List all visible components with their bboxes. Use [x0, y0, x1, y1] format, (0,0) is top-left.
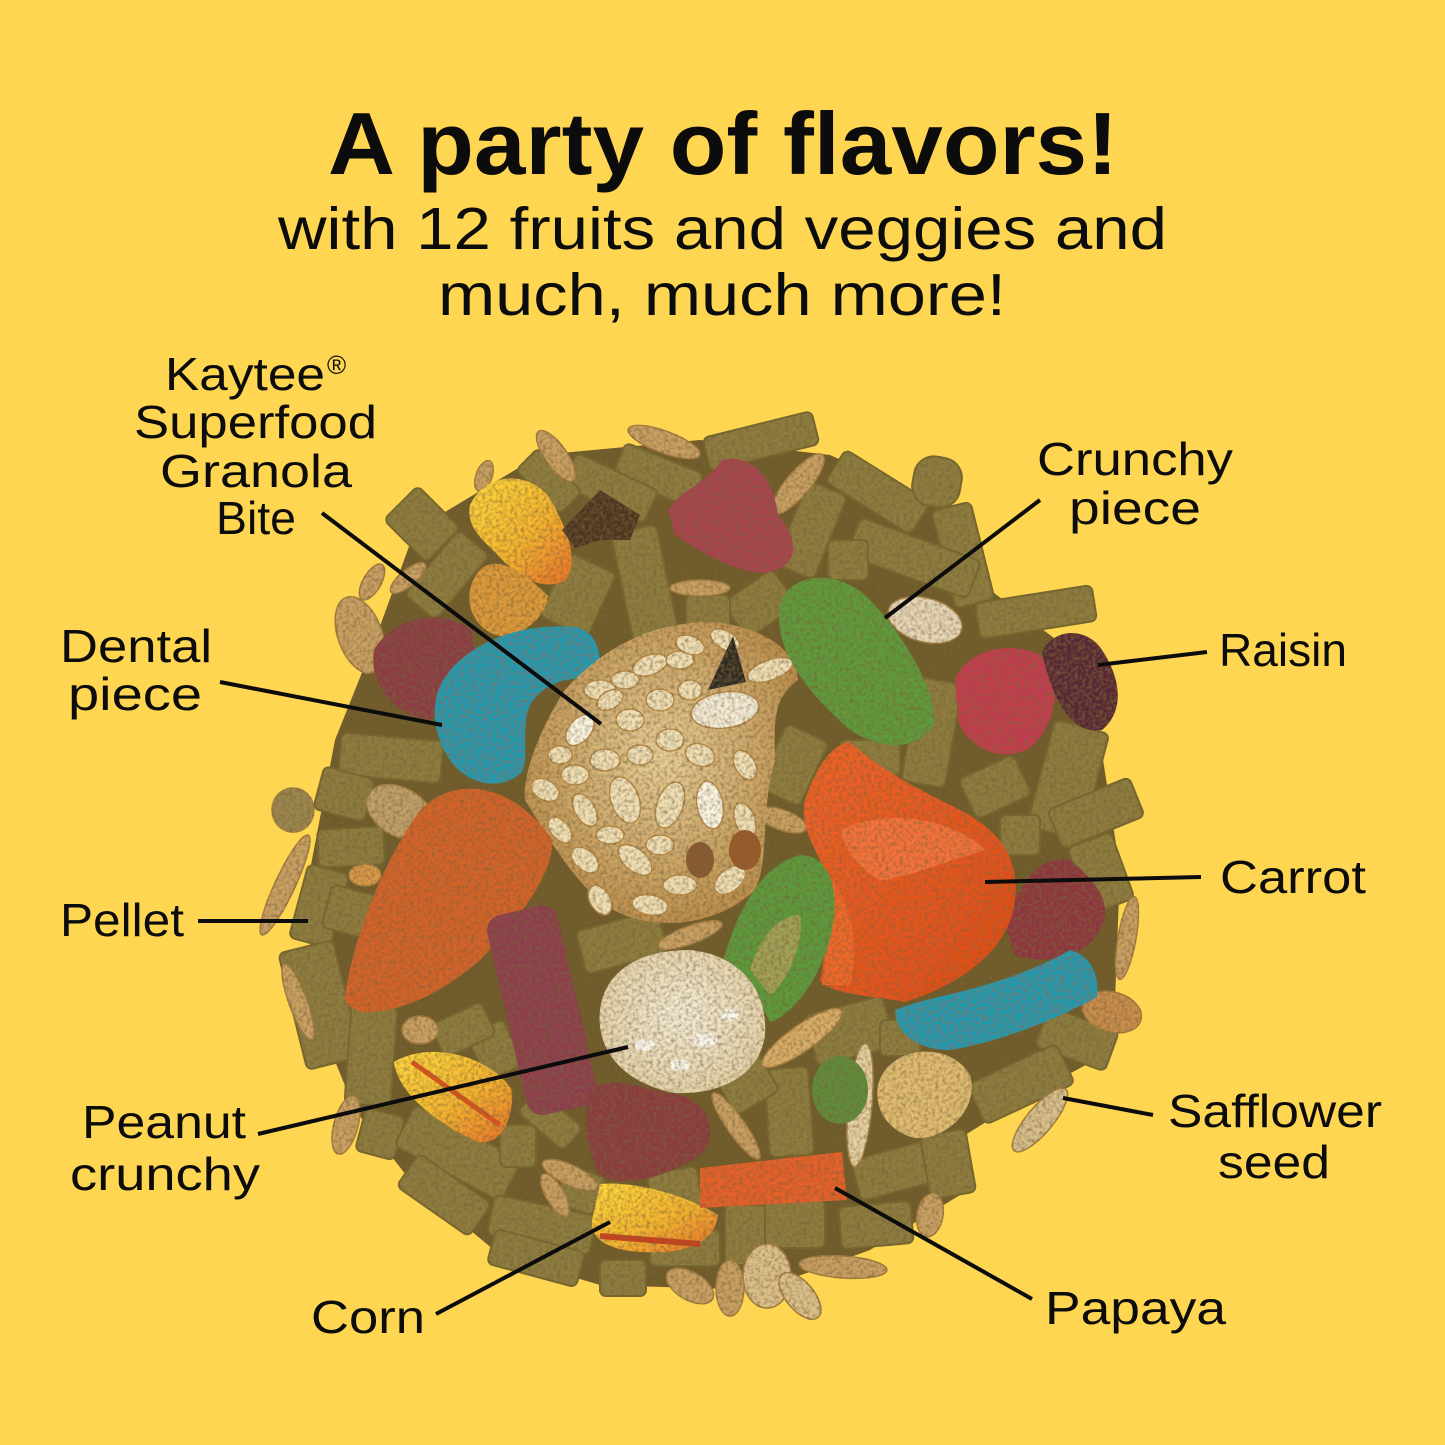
- label: Safflower seed: [1168, 1085, 1382, 1188]
- green ring: [722, 855, 835, 1022]
- corn kernels: [394, 478, 718, 1252]
- red heart: [668, 459, 793, 573]
- food pile photo: [253, 411, 1146, 1326]
- blue dental piece: [435, 626, 600, 784]
- label: Dental piece: piece: [68, 668, 202, 720]
- label: Papaya: Papaya: [1045, 1282, 1226, 1334]
- orange heart piece: [345, 789, 552, 1012]
- red ball: [373, 617, 474, 720]
- label: Carrot: Carrot: [1220, 851, 1366, 903]
- label: Corn: Corn: [311, 1291, 425, 1343]
- label: Peanut crunchy: crunchy: [70, 1148, 260, 1200]
- red heart lower: [586, 1083, 710, 1181]
- granola bite: [525, 622, 798, 923]
- label: Kaytee Superfood Granola Bite: [134, 348, 377, 544]
- dark red piece: [1005, 859, 1105, 960]
- label: Crunchy piece: [1037, 433, 1233, 534]
- label: Raisin: Raisin: [1219, 624, 1347, 676]
- dark base of pile: [310, 440, 1120, 1290]
- peanut crunchy: [600, 950, 765, 1093]
- label: Pellet: Pellet: [60, 894, 184, 946]
- title: A party of flavors!: [328, 94, 1118, 193]
- papaya: [700, 1152, 847, 1208]
- label: Kaytee Superfood Granola Bite: Superfood: [134, 396, 377, 448]
- leader lines: [198, 500, 1207, 1314]
- label: Safflower seed: Safflower: [1168, 1085, 1382, 1137]
- subtitle: [277, 196, 1167, 328]
- purple pellet: [484, 902, 600, 1118]
- label: Kaytee Superfood Granola Bite: Granola: [160, 445, 352, 497]
- label: Peanut crunchy: Peanut: [82, 1096, 246, 1148]
- raisin: [1042, 633, 1118, 730]
- label: Dental piece: Dental: [60, 620, 212, 672]
- pellets: [278, 411, 1145, 1296]
- green pea: [812, 1056, 868, 1124]
- green crunchy piece: [779, 578, 934, 745]
- label: Crunchy piece: piece: [1069, 482, 1201, 534]
- seeds and oats: [253, 419, 1146, 1326]
- dark fruit piece: [562, 490, 640, 548]
- label: Crunchy piece: Crunchy: [1037, 433, 1233, 485]
- label: Kaytee Superfood Granola Bite: Bite: [216, 492, 296, 544]
- subtitle: with 12 fruits and veggies and: [277, 196, 1167, 262]
- hazelnut piece: [877, 1052, 972, 1138]
- blue piece right: [895, 950, 1098, 1050]
- label: Dental piece: [60, 620, 212, 720]
- label: Kaytee Superfood Granola Bite: ®: [327, 350, 346, 380]
- label: Kaytee Superfood Granola Bite: Kaytee: [165, 348, 325, 400]
- label: Peanut crunchy: [70, 1096, 260, 1200]
- label: Safflower seed: seed: [1218, 1136, 1330, 1188]
- subtitle: much, much more!: [438, 262, 1006, 328]
- carrot: [804, 742, 1016, 1002]
- red round piece: [955, 648, 1055, 754]
